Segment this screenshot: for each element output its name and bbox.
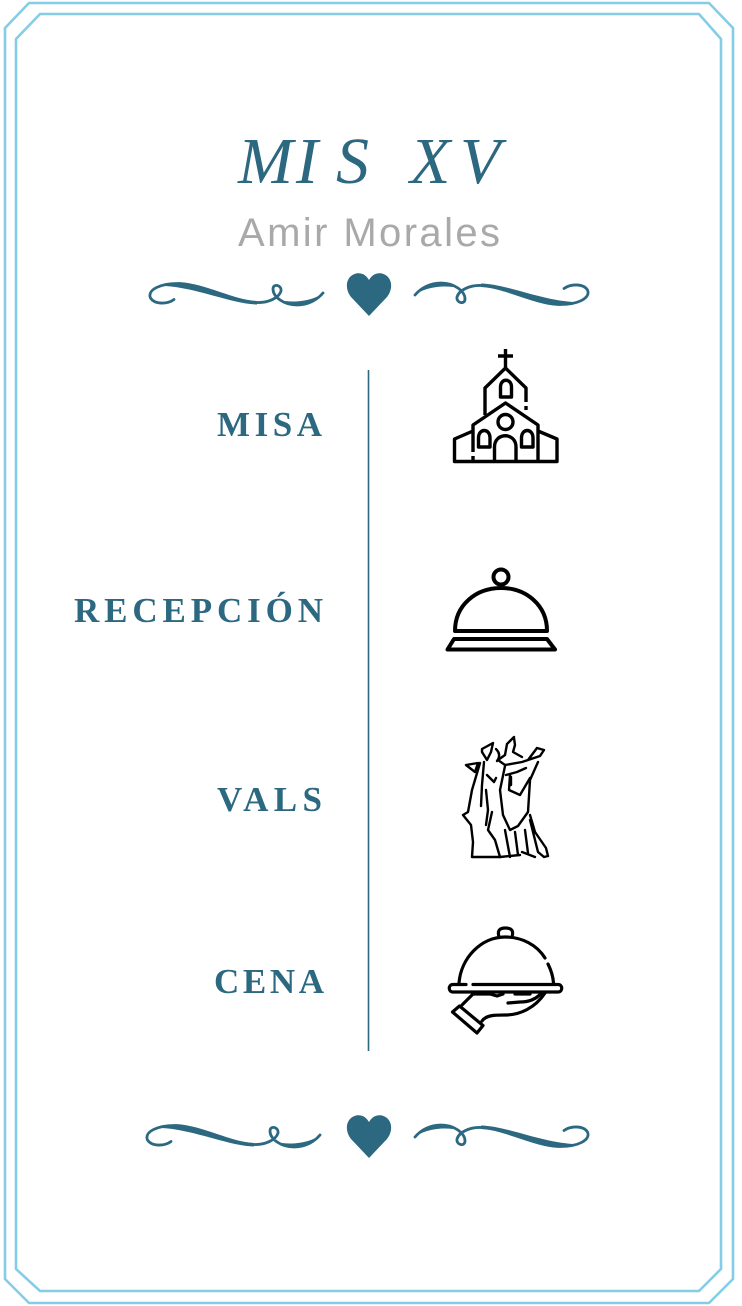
- label: misa: MISA: [217, 405, 323, 444]
- icon: serving tray: [449, 928, 562, 1033]
- label: vals: VALS: [217, 780, 322, 819]
- top ornament: [150, 273, 588, 316]
- label: recepcion: RECEPCIÓN: [74, 590, 323, 630]
- label: cena: CENA: [214, 962, 325, 1001]
- bottom ornament: [147, 1115, 588, 1158]
- icon: service bell: [448, 570, 555, 650]
- timeline divider: [368, 370, 370, 1051]
- title: MIS XV: [237, 125, 507, 198]
- subtitle: Amir Morales: [238, 211, 500, 255]
- icon: dancing couple: [463, 737, 548, 857]
- icon: church: [454, 349, 557, 462]
